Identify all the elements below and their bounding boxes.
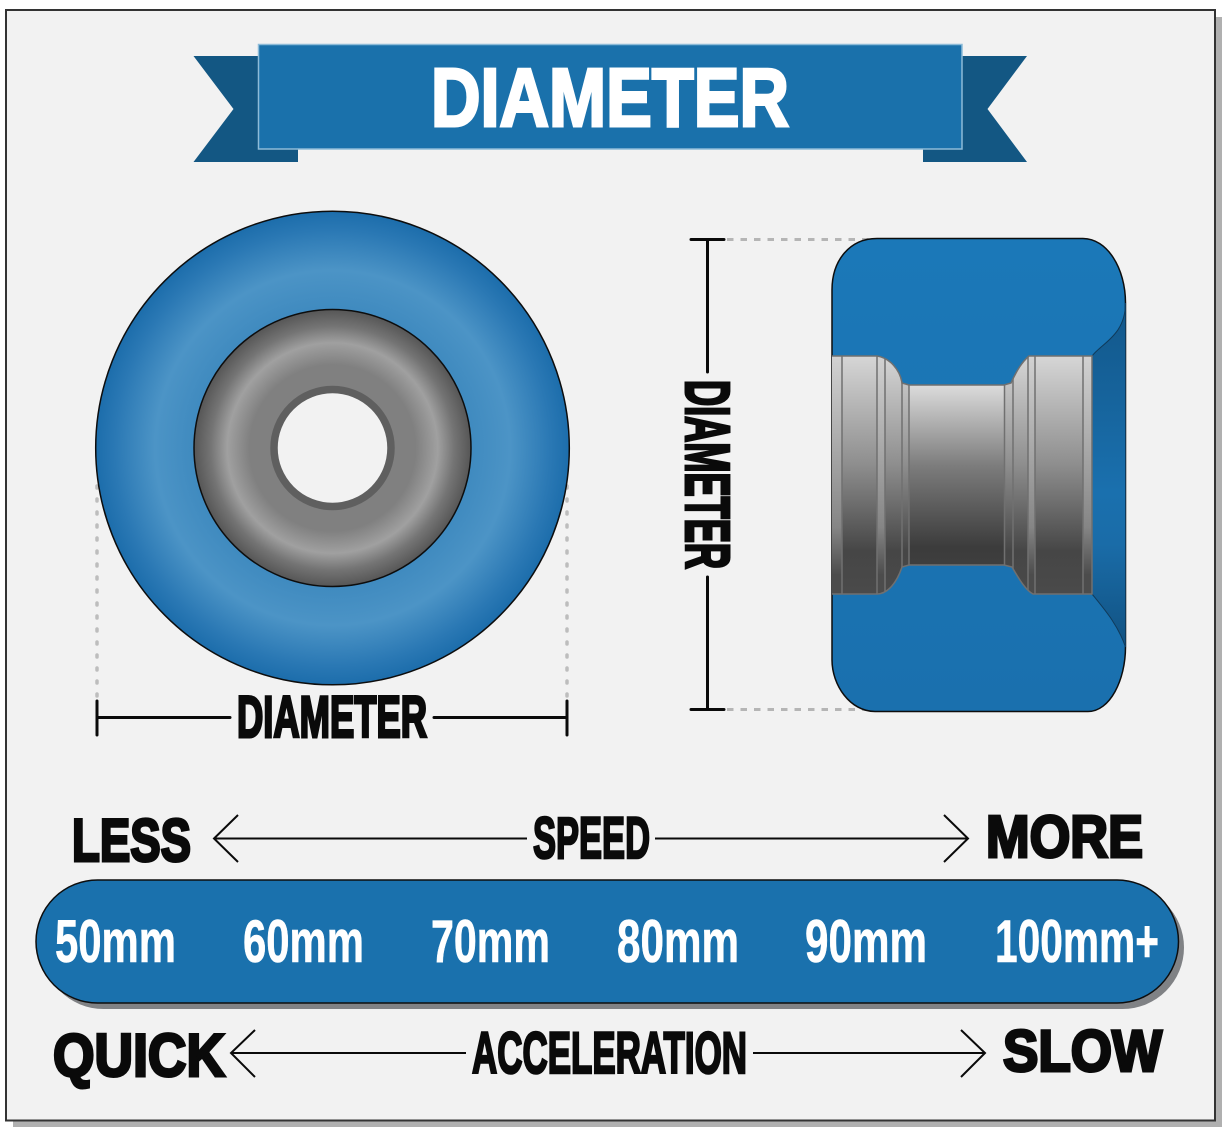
ribbon tail right [923, 56, 1027, 162]
dimension lines [691, 240, 724, 710]
banner body [258, 44, 962, 149]
speed scale [72, 804, 1143, 874]
arrow: left [231, 1030, 466, 1077]
dashed guides [727, 240, 870, 710]
bearing hub [832, 356, 1092, 594]
label: speed: SPEED [533, 806, 650, 871]
ribbon tail left [194, 56, 298, 162]
front view wheel [96, 211, 569, 706]
label: acceleration: ACCELERATION [472, 1021, 747, 1086]
dotted guides [97, 486, 567, 706]
size labels: 80mm [617, 908, 739, 975]
size labels: 50mm [55, 908, 176, 975]
recessed side [1092, 303, 1126, 647]
label: more: MORE [986, 804, 1143, 870]
size scale bar [36, 880, 1184, 1009]
horizontal diameter dimension [97, 685, 567, 750]
side view wheel [832, 238, 1126, 712]
tyre outline [832, 238, 1126, 712]
arrow: left [214, 815, 527, 862]
size labels [55, 908, 1159, 975]
dimension lines [97, 701, 567, 735]
title: DIAMETER [431, 51, 789, 144]
wheel hub [194, 310, 471, 586]
acceleration scale [53, 1019, 1162, 1089]
arrow: right [655, 815, 968, 862]
label: quick: QUICK [53, 1022, 225, 1089]
bar [36, 880, 1178, 1003]
dimension label: DIAMETER [237, 685, 427, 750]
bar shadow [42, 886, 1184, 1009]
size labels: 60mm [243, 908, 364, 975]
label: slow: SLOW [1003, 1019, 1162, 1084]
dimension label: DIAMETER [672, 380, 741, 569]
size labels: 90mm [805, 908, 927, 975]
arrow: right [753, 1030, 985, 1077]
vertical diameter dimension [672, 240, 870, 710]
wheel bore [274, 390, 391, 506]
label: less: LESS [72, 807, 191, 874]
size labels: 70mm [431, 908, 550, 975]
title banner [194, 44, 1027, 162]
wheel tyre [96, 211, 569, 685]
